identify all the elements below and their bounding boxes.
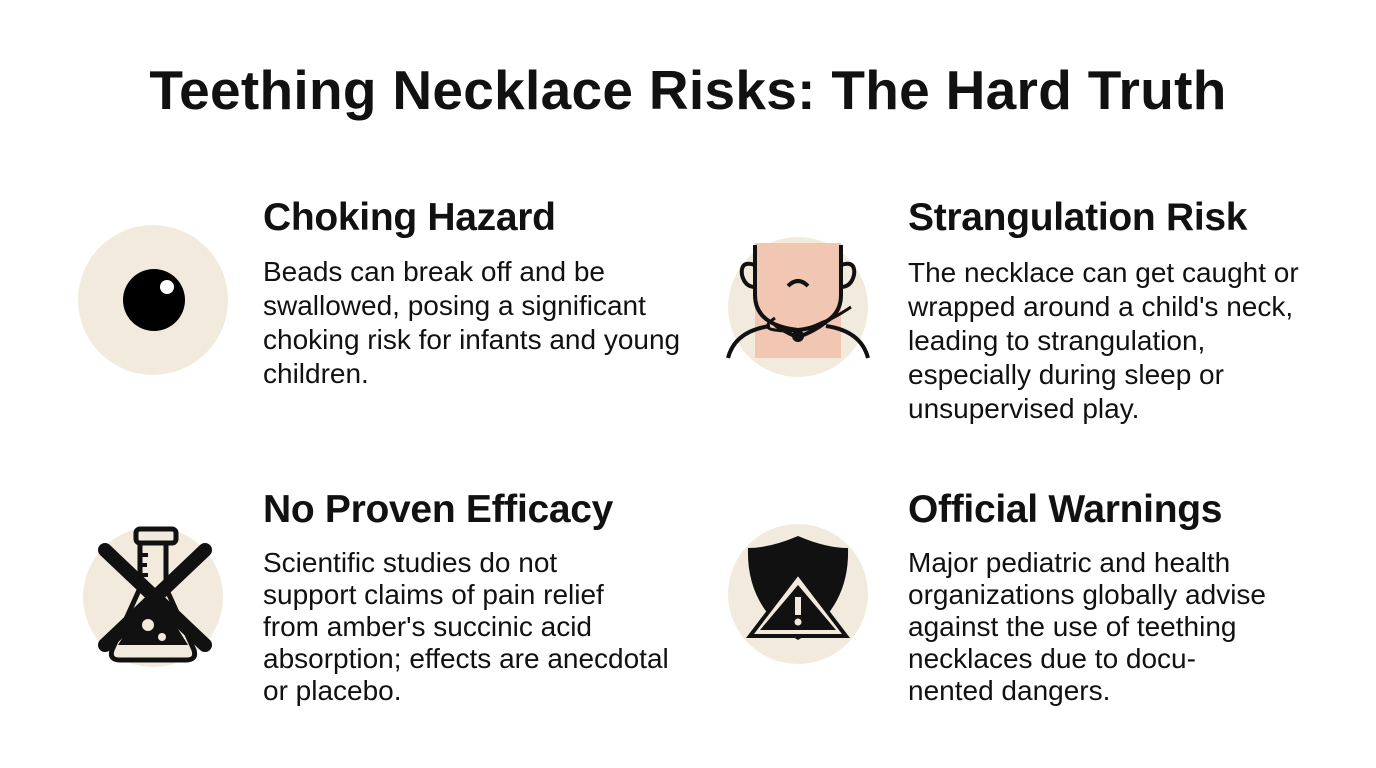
heading: Strangulation Risk [908, 196, 1247, 239]
text: wrapped around a child's neck, [908, 291, 1293, 322]
text: against the use of teething [908, 611, 1236, 642]
text [908, 257, 1299, 424]
text: absorption; effects are anecdotal [263, 643, 669, 674]
icon: crossed flask [83, 526, 223, 667]
text: support claims of pain relief [263, 579, 604, 610]
icon: child with necklace [726, 237, 870, 377]
text: unsupervised play. [908, 393, 1139, 424]
heading: No Proven Efficacy [263, 488, 613, 531]
icon: bead [78, 225, 228, 375]
text: nented dangers. [908, 675, 1110, 706]
heading: Choking Hazard [263, 196, 556, 239]
text: especially during sleep or [908, 359, 1224, 390]
text: choking risk for infants and young [263, 324, 680, 355]
text: The necklace can get caught or [908, 257, 1299, 288]
text: swallowed, posing a significant [263, 290, 646, 321]
heading: Official Warnings [908, 488, 1222, 531]
panel: strangulation risk [726, 196, 1299, 424]
text [263, 256, 680, 389]
text: necklaces due to docu- [908, 643, 1196, 674]
panel: no proven efficacy [83, 488, 669, 706]
text: leading to strangulation, [908, 325, 1205, 356]
panel: official warnings [728, 488, 1266, 706]
text: organizations globally advise [908, 579, 1266, 610]
text [263, 547, 669, 706]
title: Teething Necklace Risks: The Hard Truth [149, 59, 1227, 121]
text: from amber's succinic acid [263, 611, 592, 642]
text: Beads can break off and be [263, 256, 605, 287]
text: or placebo. [263, 675, 402, 706]
text: Major pediatric and health [908, 547, 1230, 578]
text: children. [263, 358, 369, 389]
panel: choking hazard [78, 196, 680, 389]
text [908, 547, 1266, 706]
text: Scientific studies do not [263, 547, 557, 578]
icon: warning shield [728, 524, 868, 664]
